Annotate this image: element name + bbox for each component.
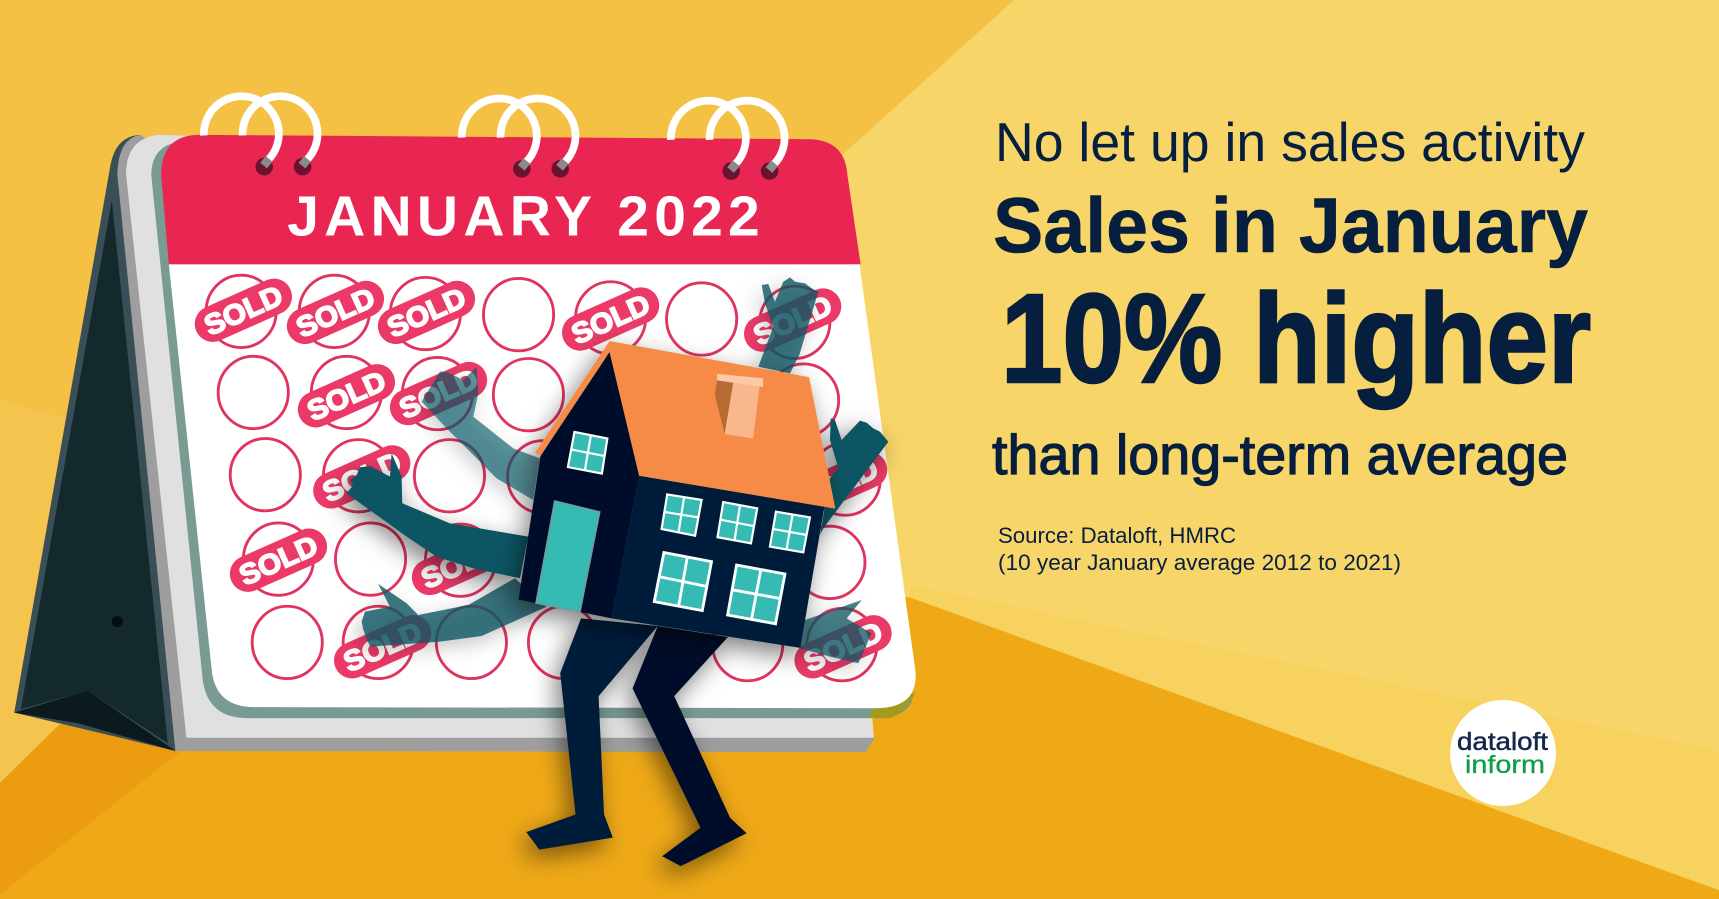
front door — [536, 501, 600, 612]
sold stamps: SOLD — [795, 453, 883, 516]
legs — [526, 618, 747, 866]
windows — [568, 432, 810, 624]
sold stamps: SOLD — [200, 280, 288, 342]
calendar illustration — [14, 96, 916, 752]
month title: JANUARY 2022 — [287, 185, 760, 249]
sold stamps: SOLD — [235, 530, 323, 592]
house body — [519, 341, 835, 648]
sold stamps: SOLD — [339, 616, 427, 679]
sold stamps: SOLD — [567, 288, 655, 351]
sold stamps: SOLD — [417, 533, 505, 596]
calendar pages block — [117, 135, 915, 752]
sold stamps: SOLD — [303, 365, 391, 428]
binding rings — [204, 96, 785, 180]
sold stamps: SOLD — [318, 446, 406, 509]
dataloft inform logo — [1450, 700, 1556, 806]
sold stamps: SOLD — [799, 616, 887, 679]
sold stamps: SOLD — [395, 363, 483, 426]
calendar stand — [14, 135, 186, 751]
sold stamps: SOLD — [749, 290, 837, 352]
source note: Source: Dataloft, HMRC — [998, 523, 1236, 548]
headline: 10% higher: 10% higher — [1001, 268, 1591, 409]
headline: than long-term average: than long-term average — [992, 423, 1568, 486]
date circles — [206, 275, 880, 681]
sold stamps: SOLD — [292, 282, 380, 345]
headline: sales in January: Sales in January — [993, 181, 1588, 269]
dataloft inform logo: dataloft — [1457, 728, 1548, 756]
house character — [347, 277, 888, 866]
dataloft inform logo: inform — [1465, 751, 1545, 779]
calendar red header — [161, 135, 861, 264]
chimney — [715, 374, 763, 439]
source note — [998, 523, 1401, 575]
solid arms — [347, 418, 888, 578]
source note: (10 year January average 2012 to 2021) — [998, 550, 1401, 575]
translucent arms — [362, 277, 872, 663]
calendar white sheet — [169, 264, 916, 708]
headline: intro line: No let up in sales activity — [995, 111, 1585, 173]
sold stamps: SOLD — [383, 282, 471, 345]
sold stamps — [189, 273, 897, 684]
